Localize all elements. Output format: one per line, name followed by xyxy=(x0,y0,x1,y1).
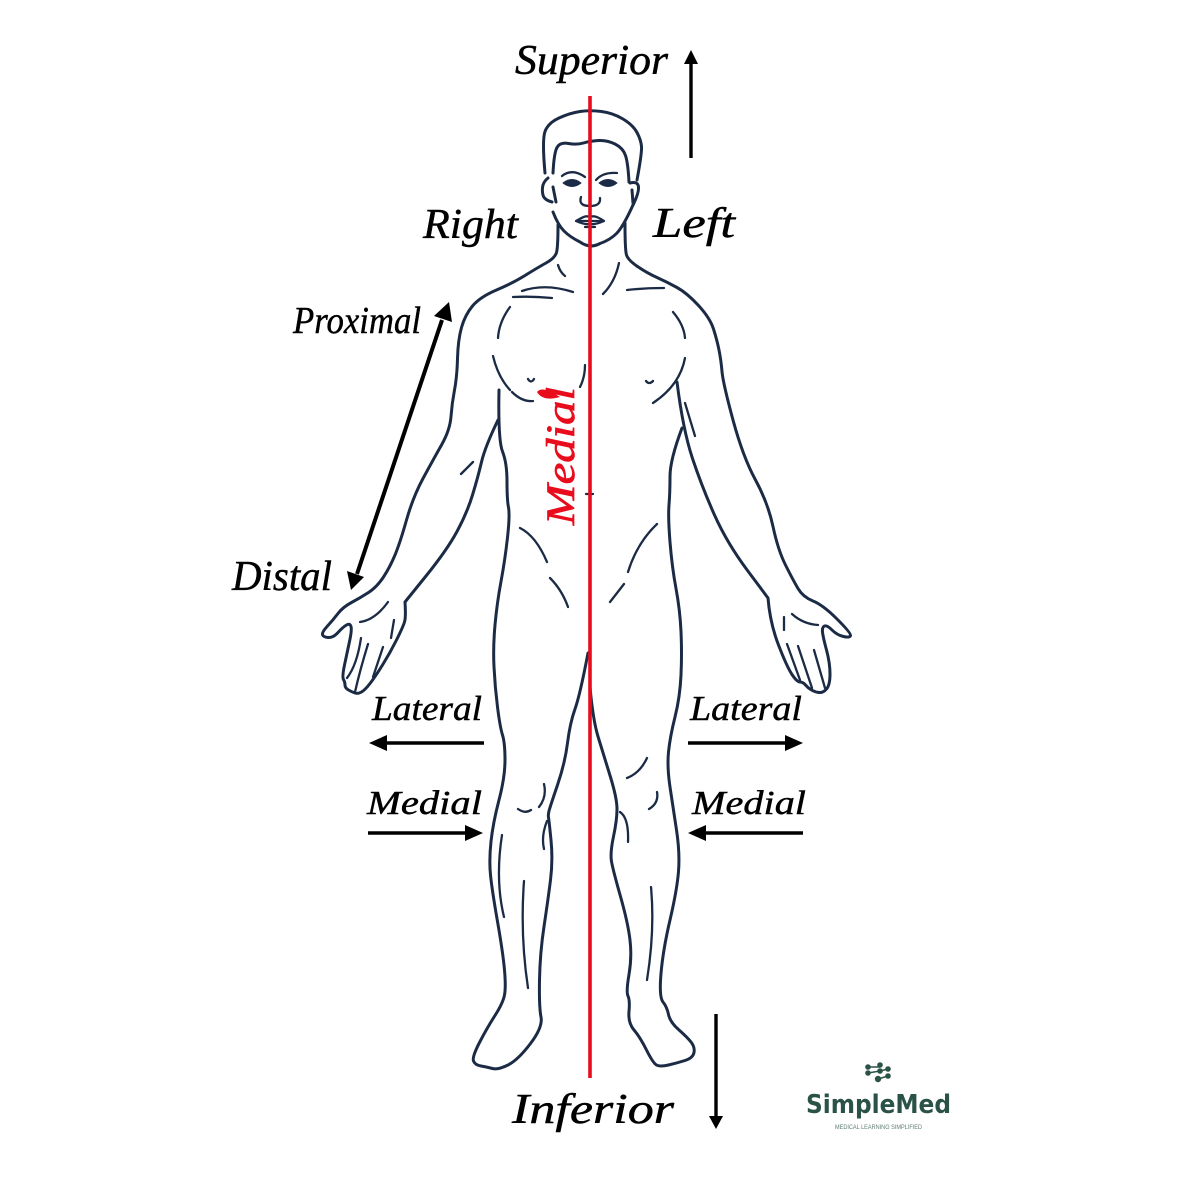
label: Superior: Superior xyxy=(515,38,669,84)
label: Right: Right xyxy=(422,202,519,248)
label: Medial (red, rotated): Medial xyxy=(538,387,583,526)
label: Lateral right: Lateral xyxy=(689,689,802,728)
head and face xyxy=(542,111,642,246)
label: Medial right: Medial xyxy=(691,785,806,822)
arrow: superior xyxy=(684,50,698,158)
SimpleMed logo xyxy=(806,1063,951,1131)
human body figure, anterior view xyxy=(322,111,851,1069)
label: Proximal: Proximal xyxy=(292,300,421,342)
icon: logo network xyxy=(866,1063,890,1081)
left-side arm and hand (viewer's right), with neck and shoulder xyxy=(625,223,851,693)
arrow: medial left xyxy=(368,825,483,841)
label: Distal: Distal xyxy=(231,554,332,600)
arrow: medial right xyxy=(688,825,803,841)
torso and right-side leg and foot (viewer's left) xyxy=(473,390,588,1069)
groin lines and navel xyxy=(520,494,657,607)
logo wordmark: SimpleMed xyxy=(806,1090,951,1120)
arrow: inferior xyxy=(709,1014,723,1129)
red midline xyxy=(588,96,592,1078)
right-side arm and hand (viewer's left), with neck and shoulder xyxy=(322,225,558,693)
arrow: lateral right xyxy=(688,735,803,751)
label: Medial left: Medial xyxy=(366,785,482,822)
label: Lateral left: Lateral xyxy=(371,689,482,728)
neck, shoulders and chest xyxy=(493,263,685,403)
torso and left-side leg and foot (viewer's right) xyxy=(590,428,694,1066)
logo tagline: MEDICAL LEARNING SIMPLIFIED xyxy=(835,1124,922,1131)
label: Inferior: Inferior xyxy=(511,1087,675,1133)
arrow: lateral left xyxy=(369,735,484,751)
arrow: proximal to distal xyxy=(347,302,452,590)
label: Left: Left xyxy=(652,201,737,247)
